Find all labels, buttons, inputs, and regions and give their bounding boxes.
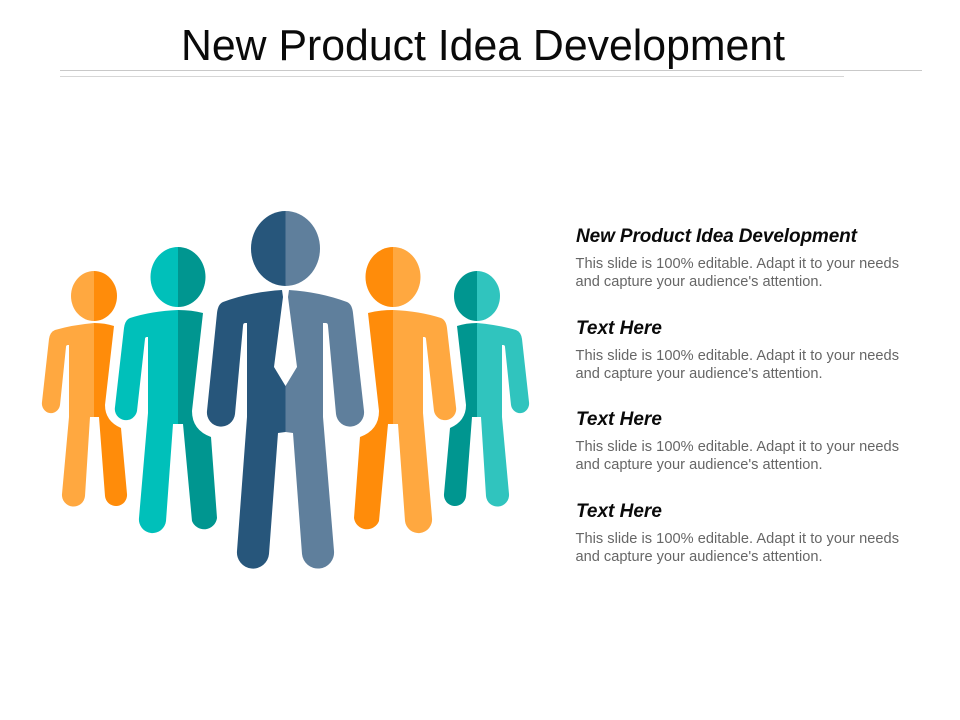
body 2: and capture your audience's attention. xyxy=(576,366,822,382)
body 1: This slide is 100% editable. Adapt it to your needs xyxy=(576,256,899,272)
figure: large orange person xyxy=(354,247,456,533)
text block 1 xyxy=(576,226,899,290)
body 4: and capture your audience's attention. xyxy=(576,549,822,565)
body 3: and capture your audience's attention. xyxy=(576,457,822,473)
text block 4 xyxy=(576,501,899,565)
title: New Product Idea Development xyxy=(181,21,785,70)
body 1 xyxy=(576,256,899,290)
figure: central businessman with tie xyxy=(207,211,364,569)
text block 2 xyxy=(576,318,899,382)
heading 1: New Product Idea Development xyxy=(576,226,858,247)
body 3: This slide is 100% editable. Adapt it to your needs xyxy=(576,439,899,455)
text block 3 xyxy=(576,409,899,473)
body 2 xyxy=(576,348,899,382)
heading 4: Text Here xyxy=(576,501,662,522)
body 4: This slide is 100% editable. Adapt it to your needs xyxy=(576,531,899,547)
heading 2: Text Here xyxy=(576,318,662,339)
figure: large teal person xyxy=(115,247,217,533)
heading 3: Text Here xyxy=(576,409,662,430)
figure: small orange person xyxy=(42,271,127,507)
figure: small teal person xyxy=(444,271,529,507)
body 3 xyxy=(576,439,899,473)
people illustration xyxy=(42,211,529,569)
body 1: and capture your audience's attention. xyxy=(576,274,822,290)
body 4 xyxy=(576,531,899,565)
body 2: This slide is 100% editable. Adapt it to your needs xyxy=(576,348,899,364)
